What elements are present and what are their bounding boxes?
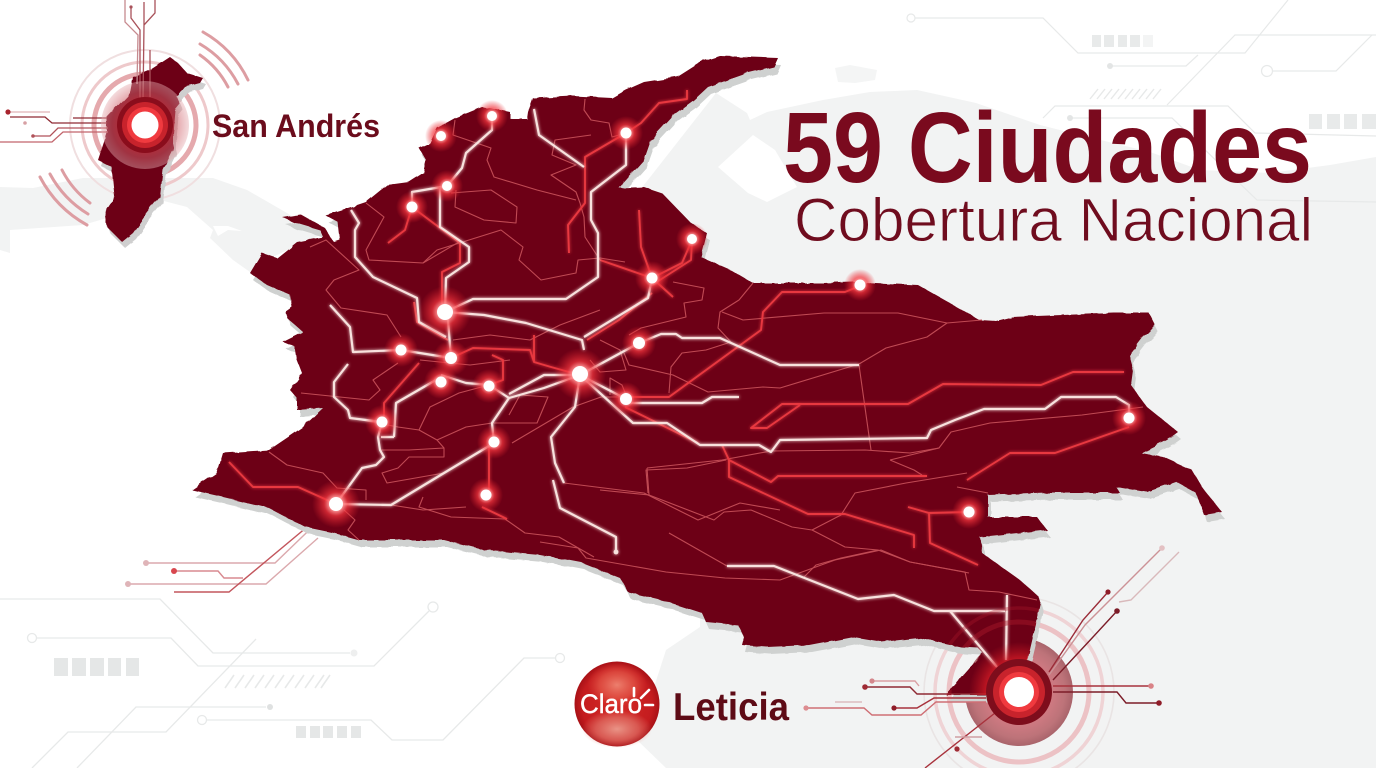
Label: San Andrés: San Andrés (212, 108, 380, 144)
subtitle: Cobertura Nacional: Cobertura Nacional (794, 186, 1313, 254)
city nodes (312, 100, 1146, 529)
Leticia signal rings (924, 597, 1114, 768)
title: 59 Ciudades: 59 Ciudades (783, 92, 1312, 204)
main map of Colombia (192, 56, 1225, 702)
Claro logo (574, 662, 660, 748)
bright red routes (229, 90, 1129, 565)
white main routes (330, 109, 1129, 667)
Leticia circuit lines (803, 545, 1179, 768)
San Andrés node (101, 81, 189, 169)
thin river and boundary network (269, 99, 1143, 600)
San Andrés signal rings and arcs (40, 32, 248, 225)
background circuit lines: top right (907, 0, 1376, 202)
Leticia node (946, 606, 1052, 725)
Claro logo: Claro (580, 689, 642, 719)
San Andrés circuit lines (0, 0, 155, 142)
San Andrés island (98, 57, 206, 248)
Label: Leticia: Leticia (673, 686, 789, 729)
circuit lines: southwest of map (125, 510, 330, 592)
background circuit lines: bottom left (0, 599, 564, 768)
